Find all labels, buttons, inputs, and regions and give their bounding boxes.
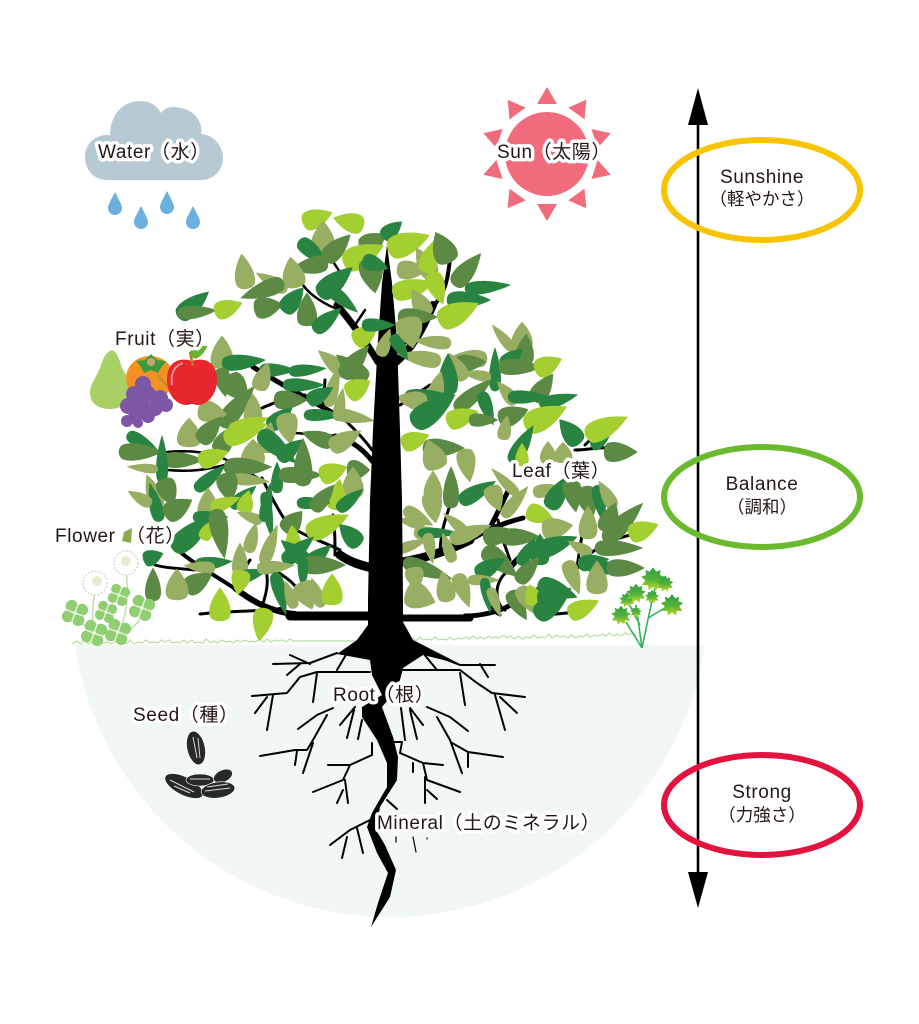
callout: strong: Strong bbox=[732, 782, 792, 803]
white flowers bbox=[83, 551, 138, 595]
four-leaf clovers bbox=[60, 582, 157, 648]
pear bbox=[90, 350, 132, 409]
scale arrow bbox=[688, 88, 708, 908]
tree trunk and roots bbox=[252, 245, 525, 927]
callout: strong: （力強さ） bbox=[718, 805, 806, 825]
fruit group bbox=[90, 328, 217, 428]
stems bbox=[80, 570, 144, 634]
sun disc bbox=[505, 112, 589, 196]
tree branches bbox=[155, 230, 630, 618]
callout: balance: （調和） bbox=[727, 497, 797, 517]
label: flower bbox=[55, 525, 185, 547]
seeds bbox=[161, 730, 236, 804]
sun rays bbox=[480, 87, 614, 221]
label: flower: Flower bbox=[55, 526, 116, 547]
parsley bbox=[611, 567, 683, 648]
foliage: upper right bbox=[394, 321, 638, 467]
cloud shape bbox=[85, 101, 223, 180]
label: leaf: Leaf（葉） bbox=[512, 460, 610, 482]
callout: sunshine: Sunshine bbox=[720, 167, 804, 188]
callout: balance bbox=[664, 447, 860, 547]
label: sun: Sun（太陽） bbox=[497, 141, 611, 163]
foliage: middle right bbox=[395, 435, 662, 626]
label: water: Water（水） bbox=[98, 141, 210, 163]
persimmon bbox=[126, 356, 174, 400]
cloud with water label bbox=[85, 101, 223, 229]
grapes bbox=[120, 376, 173, 428]
callout: sunshine bbox=[664, 140, 860, 240]
label: fruit: Fruit（実） bbox=[115, 328, 215, 350]
sun with label bbox=[480, 87, 614, 221]
callout: balance: Balance bbox=[726, 474, 798, 495]
grass line bbox=[72, 633, 636, 644]
foliage: crown top bbox=[172, 203, 512, 364]
root branches bbox=[252, 647, 525, 858]
apple bbox=[167, 360, 217, 405]
clover plants bbox=[60, 551, 157, 648]
label: mineral: Mineral（土のミネラル） bbox=[377, 812, 600, 834]
soil semicircle bbox=[75, 645, 705, 917]
label: flower: （花） bbox=[126, 525, 185, 547]
label: root: Root（根） bbox=[333, 684, 434, 706]
label: seed: Seed（種） bbox=[133, 704, 239, 726]
trunk and taproot bbox=[337, 245, 460, 927]
foliage: middle left bbox=[119, 411, 370, 643]
water drops bbox=[108, 191, 200, 229]
callout: strong bbox=[664, 755, 860, 855]
foliage: upper left bbox=[196, 335, 376, 458]
callout: sunshine: （軽やかさ） bbox=[710, 189, 814, 209]
